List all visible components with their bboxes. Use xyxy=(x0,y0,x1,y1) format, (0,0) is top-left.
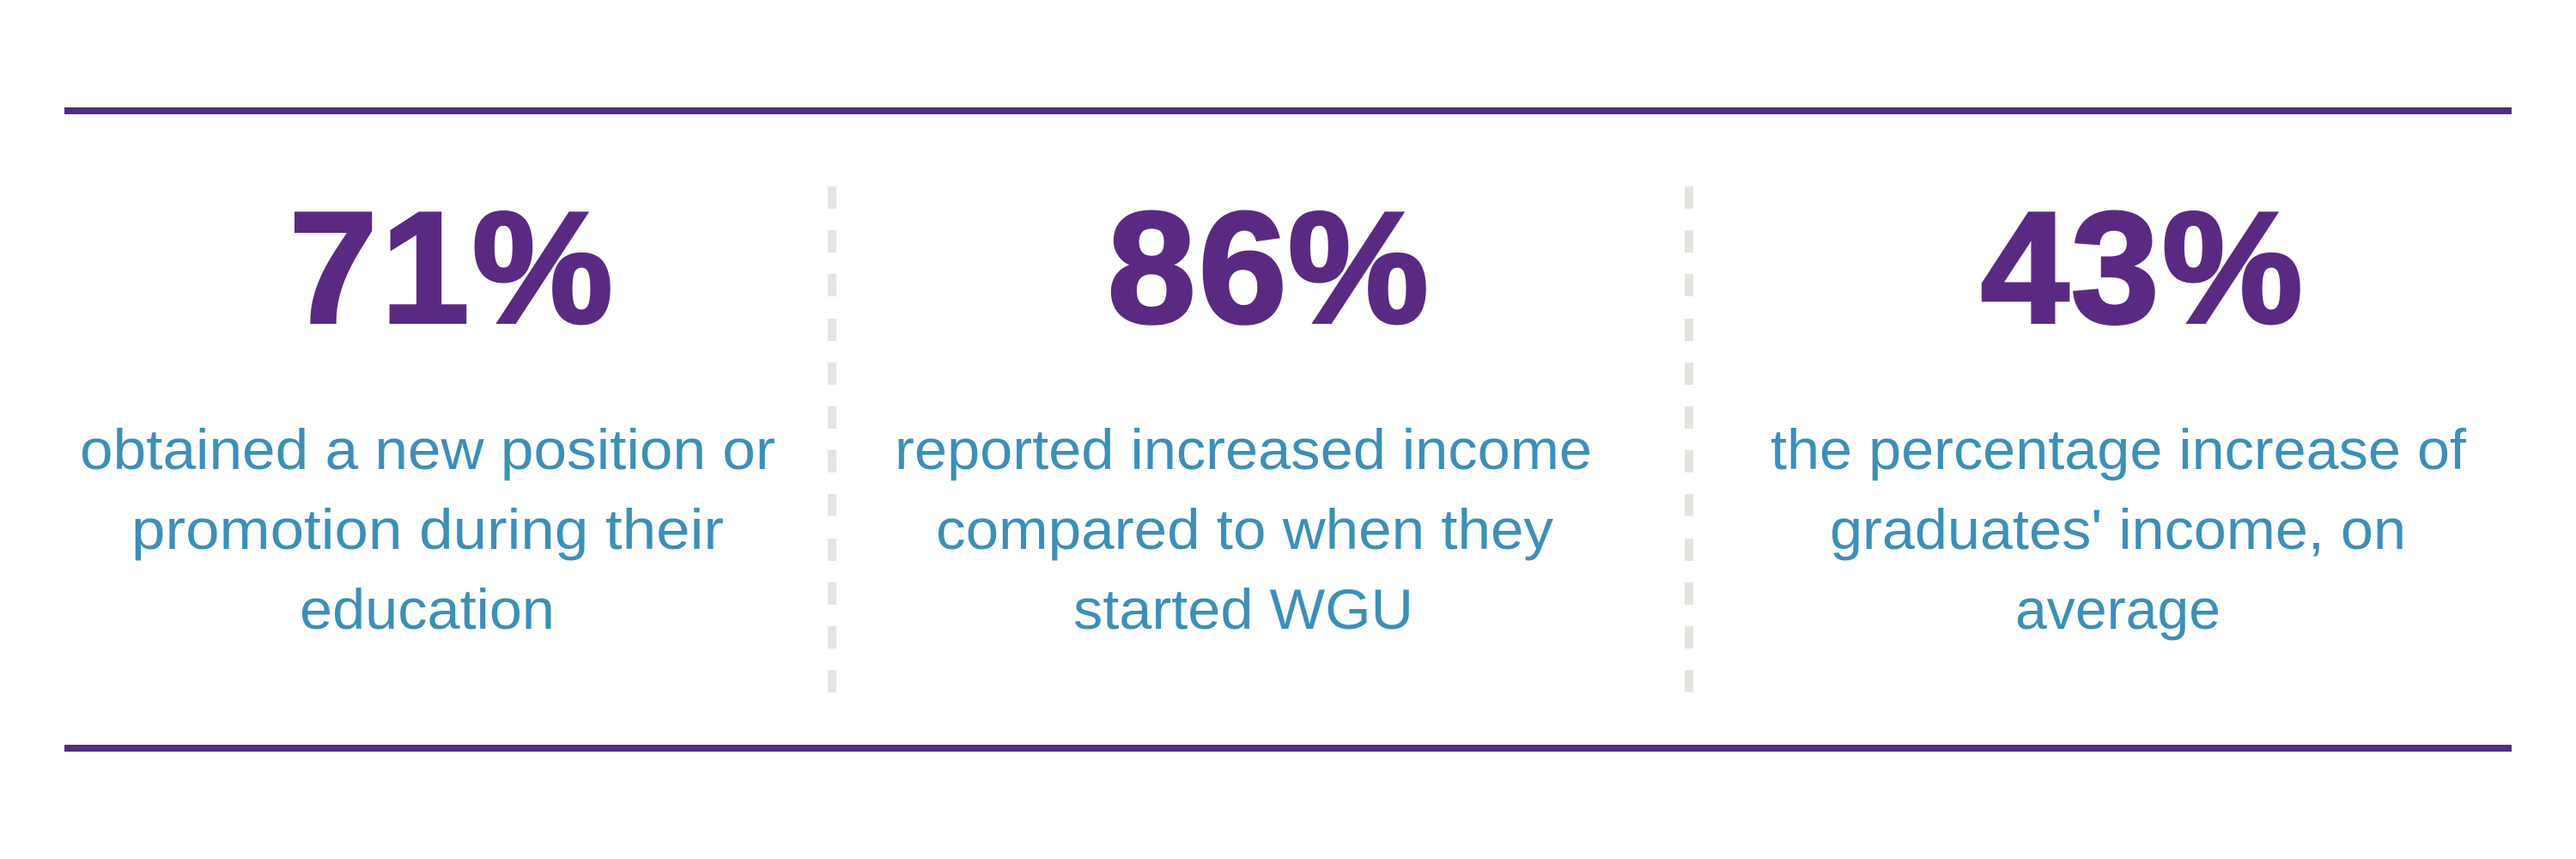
description: increased income: compared to when they xyxy=(936,497,1553,561)
description: new position or promotion: promotion during their xyxy=(131,497,724,561)
description: new position or promotion: education xyxy=(300,577,555,641)
divider: right dashed line xyxy=(1685,186,1693,692)
bottom rule xyxy=(64,745,2512,752)
description: increased income: reported increased income xyxy=(895,417,1592,481)
stat value: 86%: 86% xyxy=(1108,179,1429,356)
divider: left dashed line xyxy=(828,186,836,692)
top rule xyxy=(64,107,2512,114)
description: percentage increase of income: graduates' income, on xyxy=(1830,497,2406,561)
description: percentage increase of income: the percentage increase of xyxy=(1771,417,2467,481)
description: new position or promotion: obtained a new position or xyxy=(80,417,775,481)
stat value: 71%: 71% xyxy=(289,179,613,356)
stat value: 43%: 43% xyxy=(1981,179,2303,356)
panel: stat 71% xyxy=(80,179,775,641)
description: percentage increase of income xyxy=(1771,417,2467,641)
panel: stat 43% xyxy=(1771,179,2467,641)
description: increased income xyxy=(895,417,1592,641)
description: percentage increase of income: average xyxy=(2015,577,2221,641)
description: new position or promotion xyxy=(80,417,775,641)
panel: stat 86% xyxy=(895,179,1592,641)
description: increased income: started WGU xyxy=(1073,577,1413,641)
